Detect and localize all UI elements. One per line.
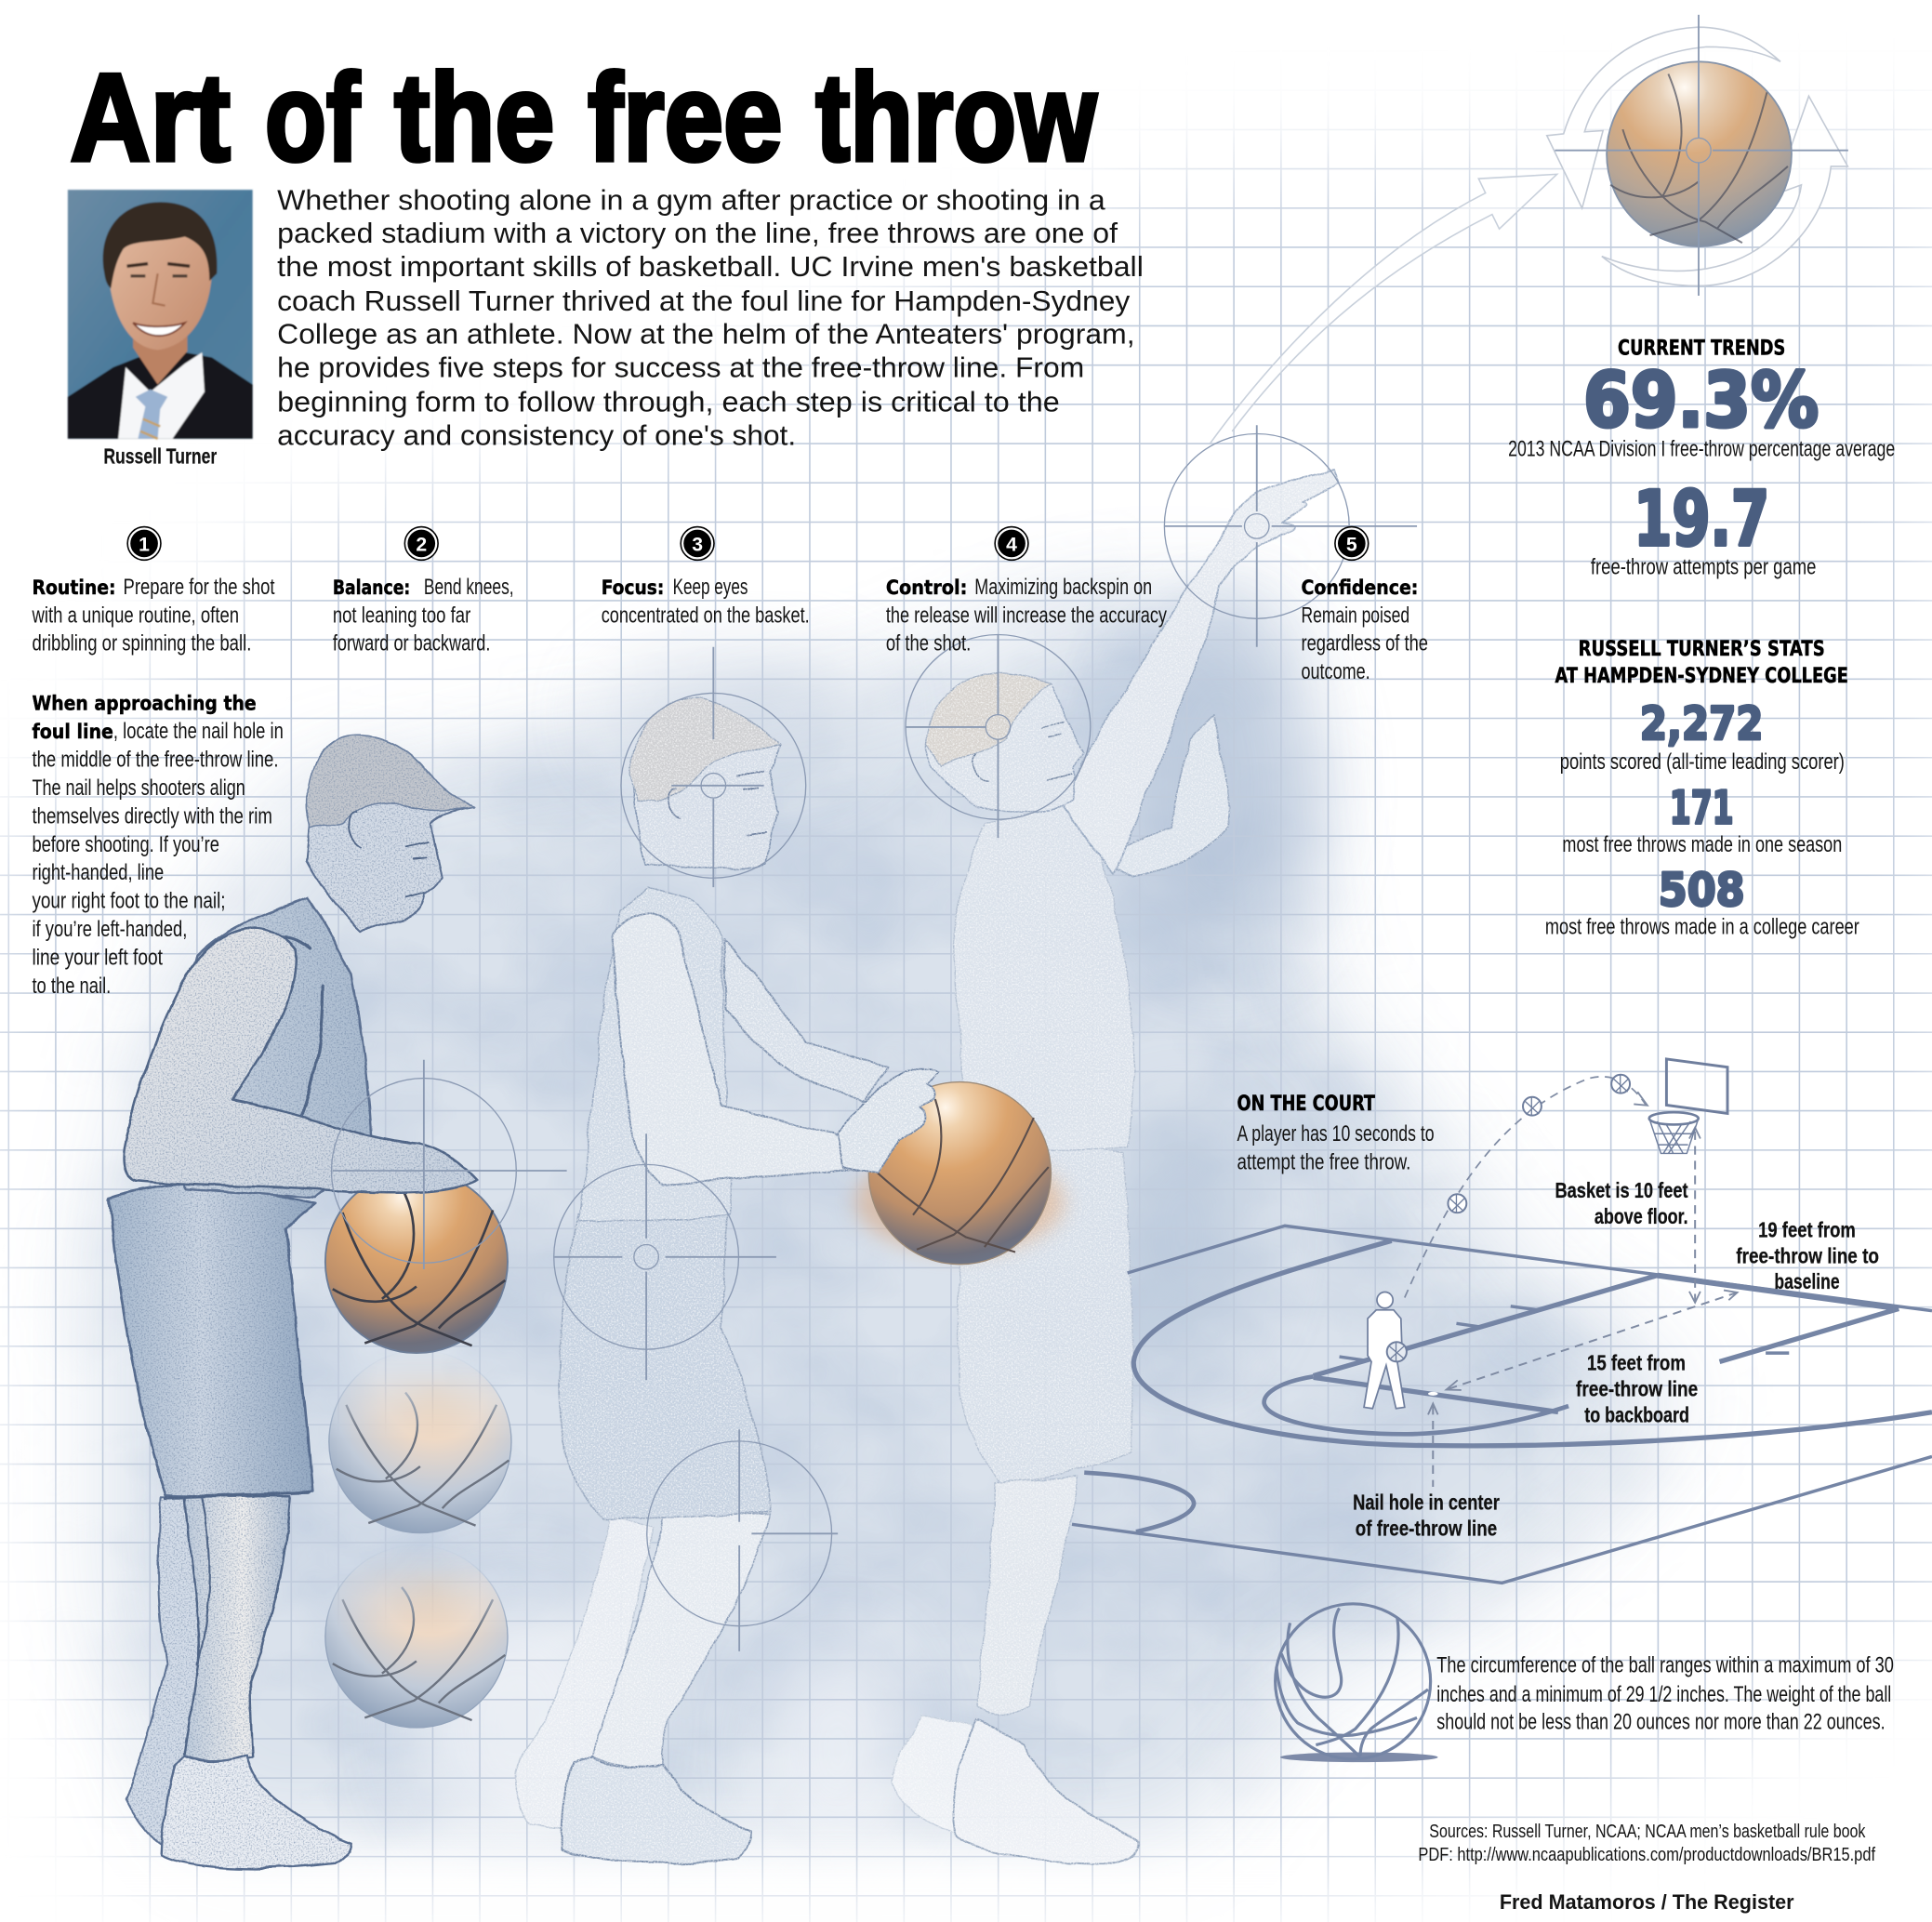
- mini ball 2: [1523, 1096, 1542, 1116]
- ball: ghost 1: [329, 1350, 511, 1533]
- hair: [927, 673, 1051, 766]
- photo: Russell Turner: [68, 190, 253, 439]
- foul line advice: if you’re left-handed,: [32, 917, 187, 942]
- hair: [631, 697, 781, 801]
- step 4 text: control: Maximizing backspin on: [974, 575, 1152, 600]
- intro text: College as an athlete. Now at the helm of the Anteaters' program,: [277, 319, 1135, 351]
- player's ball: [1387, 1342, 1407, 1361]
- label: nail hole: Nail hole in center: [1353, 1490, 1500, 1514]
- target circle: hand: [331, 1060, 567, 1269]
- label: 19 feet: baseline: [1774, 1269, 1840, 1293]
- label: 19 feet: free-throw line to: [1736, 1243, 1879, 1267]
- jersey: [148, 897, 372, 1198]
- shorts: [958, 1133, 1133, 1482]
- Russell Turner's stats: 171: [1670, 780, 1734, 834]
- on the court text: [1237, 1092, 1435, 1175]
- step 5 text: confidence: [1301, 576, 1428, 684]
- backboard: [1666, 1059, 1727, 1114]
- facial features: [348, 814, 429, 897]
- label: 19 feet: 19 feet from: [1758, 1218, 1856, 1242]
- Russell Turner's stats: points scored (all-time leading scorer): [1560, 749, 1845, 775]
- step 5 text: confidence: Remain poised: [1301, 603, 1409, 628]
- step 5 text: confidence: Confidence:: [1301, 576, 1418, 599]
- Russell Turner's stats: AT HAMPDEN-SYDNEY COLLEGE: [1555, 664, 1848, 688]
- Russell Turner's stats: 2,272: [1640, 696, 1763, 750]
- foul line advice: the middle of the free-throw line.: [32, 747, 279, 772]
- step 3 text: focus: [602, 575, 810, 628]
- step 1 text: routine: [32, 575, 275, 656]
- free throw circle: [1264, 1376, 1568, 1434]
- foul line advice: foul line: [32, 720, 113, 743]
- intro text: he provides five steps for success at the free-throw line. From: [277, 352, 1084, 384]
- figure 2: focus: [515, 697, 889, 1862]
- figure 3: control and confidence: [890, 470, 1338, 1863]
- step 2 number: [404, 527, 438, 560]
- Russell Turner's stats: most free throws made in one season: [1562, 832, 1842, 857]
- flight arrow: [1210, 174, 1557, 444]
- intro text: beginning form to follow through, each step is critical to the: [277, 387, 1060, 418]
- step 5 number: [1335, 527, 1369, 560]
- foul line advice: line your left foot: [32, 946, 163, 971]
- label: 15 feet: 15 feet from: [1587, 1351, 1686, 1375]
- step 1 text: routine: Prepare for the shot: [124, 575, 275, 600]
- mini ball 3: [1611, 1075, 1630, 1094]
- Russell Turner's stats: 508: [1659, 863, 1745, 917]
- step 1 text: routine: dribbling or spinning the ball.: [32, 631, 251, 656]
- ball glow: [855, 1149, 1065, 1253]
- court outline: [1072, 1226, 1932, 1583]
- player silhouette: [1364, 1292, 1405, 1409]
- label: nail hole: of free-throw line: [1356, 1516, 1497, 1540]
- front leg: [185, 1497, 291, 1761]
- step 2 text: balance: Balance:: [333, 576, 410, 599]
- jersey: [579, 887, 731, 1221]
- rotating ball at top: [1547, 15, 1848, 296]
- head: [926, 673, 1084, 812]
- distance dashes: [1433, 1132, 1738, 1487]
- ball rules text: [1436, 1652, 1894, 1734]
- intro text: accuracy and consistency of one's shot.: [277, 419, 796, 451]
- step 2 text: balance: forward or backward.: [333, 631, 490, 656]
- step 4 text: control: of the shot.: [886, 631, 971, 656]
- label: basket height: above floor.: [1595, 1204, 1688, 1228]
- foul line advice: right-handed, line: [32, 860, 164, 885]
- foul line advice: to the nail.: [32, 974, 111, 999]
- step 3 text: focus: concentrated on the basket.: [602, 603, 810, 628]
- head: [634, 701, 781, 869]
- figure 3 target circles: [906, 425, 1417, 838]
- Russell Turner's stats: RUSSELL TURNER’S STATS: [1579, 637, 1825, 661]
- title: throw: [815, 48, 1097, 187]
- court diagram: [1072, 1059, 1932, 1583]
- title: of: [265, 48, 360, 187]
- rear arm: [1103, 716, 1228, 878]
- label: 15 feet: free-throw line: [1576, 1377, 1698, 1401]
- baseline thick section: [1657, 1276, 1899, 1308]
- step 4 number: 4: [1006, 534, 1017, 555]
- label: basket height: Basket is 10 feet: [1555, 1178, 1688, 1202]
- step 1 number: [127, 527, 161, 560]
- current trends stats: CURRENT TRENDS: [1618, 337, 1785, 361]
- figure 1: routine, dribbling: [109, 736, 473, 1868]
- label: 19 feet: [1736, 1218, 1879, 1293]
- half-court arc: [1084, 1473, 1194, 1531]
- step 2 text: balance: [333, 575, 514, 656]
- nail hole: [1428, 1392, 1438, 1396]
- shorts: [559, 1213, 770, 1519]
- foul line advice: themselves directly with the rim: [32, 803, 272, 828]
- sneaker: [562, 1756, 751, 1862]
- leg: [977, 1477, 1078, 1715]
- label: nail hole: [1353, 1490, 1500, 1540]
- sneaker: [953, 1719, 1140, 1863]
- on the court text: A player has 10 seconds to: [1237, 1121, 1435, 1147]
- step 1 text: routine: Routine:: [32, 576, 116, 599]
- intro text: packed stadium with a victory on the line, free throws are one of: [277, 218, 1118, 249]
- foul line advice: When approaching the: [32, 691, 257, 714]
- step 1 text: routine: with a unique routine, often: [32, 603, 239, 628]
- photo caption: Russell Turner: [103, 444, 217, 468]
- title: [71, 48, 1097, 187]
- step 3 text: focus: Keep eyes: [673, 575, 748, 600]
- title: Art: [71, 48, 231, 187]
- intro text: coach Russell Turner thrived at the foul line for Hampden-Sydney: [277, 285, 1131, 317]
- hair: [307, 736, 473, 828]
- back shoe: [890, 1716, 986, 1836]
- credit: Fred Matamoros / The Register: [1500, 1890, 1794, 1914]
- ball: held: [868, 1082, 1051, 1265]
- sneaker: [162, 1755, 351, 1868]
- label: basket height: [1555, 1178, 1688, 1228]
- ball: hand ball: [325, 1171, 508, 1353]
- crosshair: [1555, 15, 1848, 296]
- hand over the ball: [838, 1068, 939, 1173]
- step 4 text: control: Control:: [886, 576, 967, 599]
- figure 2 target circles: [554, 647, 838, 1651]
- figure 1 balls: [124, 928, 567, 1728]
- ball: ghost 2: [325, 1545, 508, 1728]
- current trends stats: 69.3%: [1583, 358, 1819, 445]
- title: free: [588, 48, 783, 187]
- ball: [1607, 61, 1792, 246]
- hoop and net: [1649, 1112, 1699, 1153]
- facial features: [972, 722, 1072, 781]
- far arm: [724, 939, 889, 1103]
- step 5 text: confidence: regardless of the: [1301, 631, 1428, 656]
- arm over the ball: [124, 928, 477, 1193]
- step 4 number: [995, 527, 1028, 560]
- arrowheads: [1428, 1092, 1738, 1414]
- foul line advice: , locate the nail hole in: [113, 719, 284, 744]
- step 3 text: focus: Focus:: [602, 576, 664, 599]
- near arm: [613, 913, 887, 1186]
- back leg: [515, 1516, 653, 1830]
- step 2 text: balance: Bend knees,: [424, 575, 514, 600]
- icon: basketball outline: [1276, 1604, 1438, 1762]
- step 5 text: confidence: outcome.: [1301, 659, 1370, 684]
- intro text: [277, 184, 1144, 451]
- head: [307, 736, 473, 933]
- on the court text: ON THE COURT: [1237, 1092, 1375, 1116]
- step 4 text: control: the release will increase the accuracy: [886, 603, 1167, 628]
- mini ball 1: [1448, 1194, 1466, 1213]
- foul line advice: before shooting. If you’re: [32, 832, 219, 857]
- intro text: Whether shooting alone in a gym after practice or shooting in a: [277, 184, 1105, 216]
- shading strokes: [166, 936, 323, 1664]
- foul line advice: [32, 691, 284, 999]
- lane lines: [1314, 1276, 1899, 1412]
- foul line advice: your right foot to the nail;: [32, 889, 226, 914]
- back leg and shoe: [126, 1497, 228, 1849]
- background wash: [52, 556, 1692, 1864]
- facial features: [668, 772, 766, 836]
- shorts: [109, 1183, 315, 1497]
- current trends stats: free-throw attempts per game: [1591, 555, 1816, 580]
- label: 15 feet: to backboard: [1584, 1402, 1689, 1426]
- step 2 number: 2: [416, 534, 427, 555]
- raised arm and hand: [1062, 470, 1338, 874]
- step 3 number: [681, 527, 714, 560]
- label: 15 feet: [1576, 1351, 1698, 1426]
- jersey: [954, 801, 1133, 1150]
- ball flight dashes: [1405, 1077, 1647, 1297]
- on the court text: attempt the free throw.: [1237, 1150, 1410, 1175]
- step 5 number: 5: [1346, 534, 1357, 555]
- Russell Turner's stats: [1545, 637, 1859, 940]
- current trends stats: [1508, 337, 1895, 580]
- rotation arrows: [1547, 27, 1847, 285]
- step 2 text: balance: not leaning too far: [333, 603, 470, 628]
- current trends stats: 19.7: [1634, 476, 1769, 563]
- title: the: [394, 48, 554, 187]
- step 1 number: 1: [139, 534, 150, 555]
- intro text: the most important skills of basketball. UC Irvine men's basketball: [277, 251, 1144, 283]
- three point arc: [1133, 1240, 1932, 1446]
- step 3 number: 3: [692, 534, 703, 555]
- front leg: [591, 1513, 770, 1768]
- step 4 text: control: [886, 575, 1167, 656]
- foul line advice: The nail helps shooters align: [32, 775, 245, 801]
- sources: [1418, 1821, 1875, 1865]
